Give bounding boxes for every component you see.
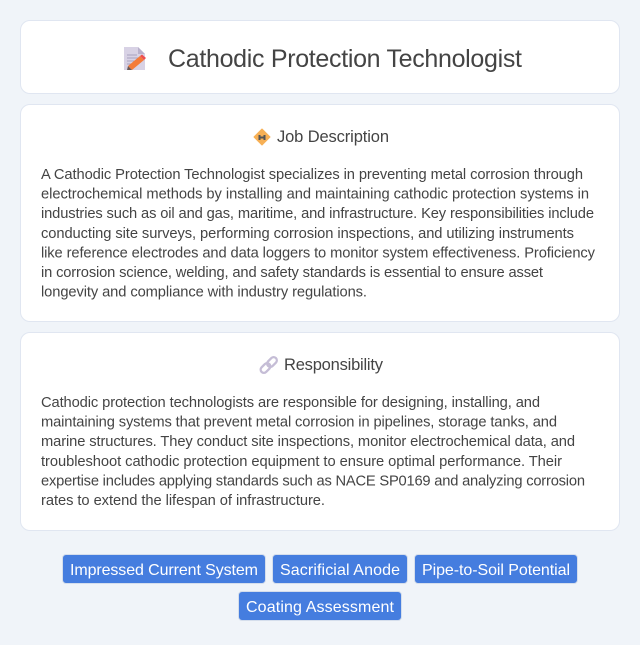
heading: responsibility: Responsibility [284, 356, 384, 374]
tag: pipe-to-soil potential: Pipe-to-Soil Potential [422, 562, 570, 579]
icon: document with pencil [124, 47, 146, 70]
text: responsibility body: troubleshoot cathodic protection equipment to ensure optimal performance. Their [41, 454, 562, 470]
text: responsibility body: marine structures. They conduct site inspections, monitor electrochemical data, and [41, 434, 575, 450]
tag: coating assessment: Coating Assessment [246, 599, 395, 616]
text: responsibility body: maintaining systems that prevent metal corrosion in pipelines, storage tanks, and [41, 415, 557, 431]
panel: responsibility [20, 332, 620, 531]
panel: title [20, 20, 620, 94]
text: responsibility body [41, 395, 585, 509]
text: job description body: electrochemical methods by installing and maintaining cathodic protection systems in [41, 187, 589, 203]
text: job description body: longevity and compliance with industry regulations. [41, 285, 367, 301]
text: job description body: industries such as oil and gas, maritime, and infrastructure. Key responsibilities include [41, 206, 594, 222]
text: responsibility body: rates to extend the lifespan of infrastructure. [41, 493, 325, 509]
text: job description body: conducting site surveys, performing corrosion inspections, and utilizing instruments [41, 226, 574, 242]
text: job description body: like reference electrodes and data loggers to monitor system effectiveness. Proficiency [41, 245, 596, 261]
tag: pipe-to-soil potential [414, 554, 578, 584]
tag: sacrificial anode: Sacrificial Anode [280, 562, 400, 579]
heading: job description: Job Description [277, 128, 389, 146]
tag: impressed current system: Impressed Current System [70, 562, 258, 579]
text: job description body: A Cathodic Protection Technologist specializes in preventing metal corrosion through [41, 167, 583, 183]
tag: coating assessment [238, 591, 402, 621]
title text: Cathodic Protection Technologist [168, 45, 522, 73]
icon: job description diamond [254, 128, 270, 146]
text: responsibility body: Cathodic protection technologists are responsible for designing, installing, and [41, 395, 540, 411]
tag: sacrificial anode [272, 554, 408, 584]
tag: impressed current system [62, 554, 266, 584]
panel: job description [20, 104, 620, 322]
text: responsibility body: expertise includes applying standards such as NACE SP0169 and analyzing corrosion [41, 473, 585, 489]
icon: chain link [260, 356, 278, 374]
text: job description body [41, 167, 596, 301]
text: job description body: in corrosion science, welding, and safety standards is essential to ensure asset [41, 265, 543, 281]
